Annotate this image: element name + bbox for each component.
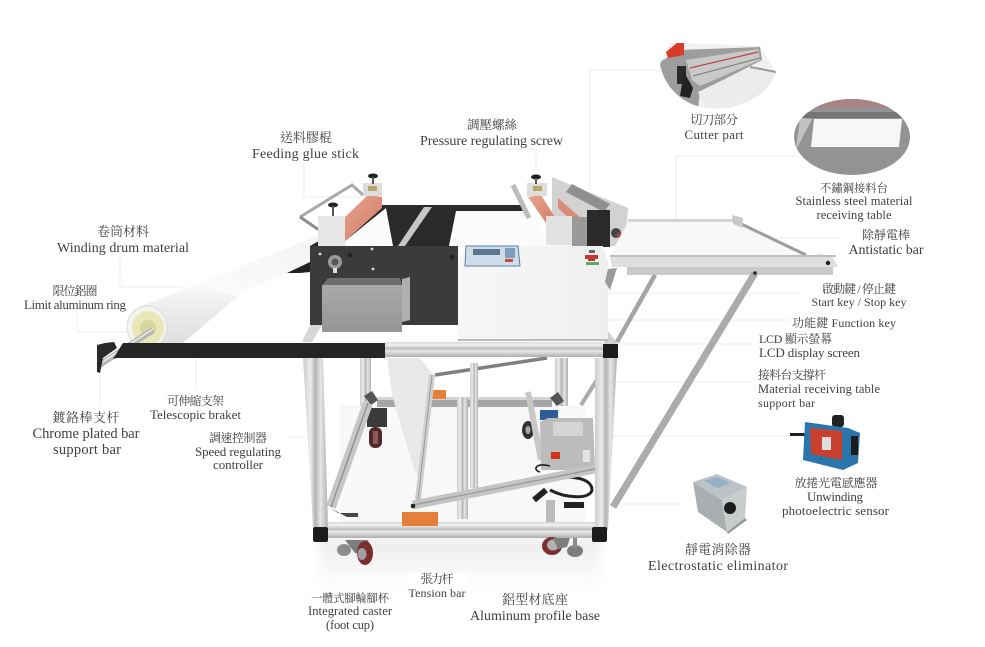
label: function key: 功能鍵 Function key xyxy=(792,315,896,330)
start and stop keys xyxy=(585,250,599,265)
label: photoelectric sensor: photoelectric sensor xyxy=(782,503,890,518)
label: tension bar xyxy=(407,571,467,601)
label: aluminum base: 鋁型材底座 xyxy=(502,592,568,607)
label: LCD display: LCD display screen xyxy=(759,345,860,360)
front casters xyxy=(337,537,583,565)
leader lines xyxy=(77,70,840,504)
rear casters xyxy=(367,408,534,448)
long diagonal brace xyxy=(411,466,610,508)
label: tension bar: Tension bar xyxy=(408,586,466,600)
label: speed controller: 調速控制器 xyxy=(209,430,267,445)
label: photoelectric sensor: 放捲光電感應器 xyxy=(794,475,878,490)
label: tension bar: 張力杆 xyxy=(420,571,454,586)
label: limit ring xyxy=(24,284,126,312)
orange block xyxy=(402,512,438,526)
inset: receiving table xyxy=(794,99,910,175)
telescopic bracket (black bar) xyxy=(113,343,385,359)
label: chrome plated bar: 鍍鉻棒支杆 xyxy=(52,410,120,425)
gray tray box xyxy=(322,277,410,332)
label: chrome plated bar: support bar xyxy=(53,442,121,458)
label: photoelectric sensor: Unwinding xyxy=(807,489,864,504)
label: electrostatic eliminator xyxy=(648,542,788,574)
cutter assembly xyxy=(552,177,628,248)
label: limit ring: Limit aluminum ring xyxy=(24,297,126,312)
label: photoelectric sensor xyxy=(782,475,890,518)
speed controller box xyxy=(540,410,595,470)
label: limit ring: 限位鋁圈 xyxy=(52,284,98,298)
label: chrome plated bar: Chrome plated bar xyxy=(32,426,140,442)
label: integrated caster xyxy=(308,591,393,632)
label: receiving table support bar: Material receiving table xyxy=(758,382,880,396)
dark rear diagonal xyxy=(435,358,547,375)
back plate xyxy=(310,205,550,246)
label: stainless table xyxy=(796,181,913,222)
label: aluminum base xyxy=(470,592,600,624)
label: aluminum base: Aluminum profile base xyxy=(470,609,600,624)
floor reflection xyxy=(320,405,600,588)
label: start stop key: 啟動鍵 / 停止鍵 xyxy=(822,281,896,296)
label: cutter part xyxy=(684,112,744,142)
label: antistatic bar: 除靜電棒 xyxy=(862,227,910,242)
label: pressure screw: 調壓螺絲 xyxy=(467,117,517,132)
label: receiving table support bar: 接料台支撐杆 xyxy=(758,367,826,382)
label: chrome plated bar xyxy=(32,410,140,458)
icon: unwinding photoelectric sensor xyxy=(790,415,860,470)
label: antistatic bar xyxy=(848,227,924,258)
label: speed controller: Speed regulating xyxy=(195,444,282,459)
label: receiving table support bar xyxy=(758,367,880,410)
label: feeding glue stick: Feeding glue stick xyxy=(252,147,359,162)
label: feeding glue stick xyxy=(252,130,359,162)
cables xyxy=(534,465,592,508)
winding drum material xyxy=(127,235,320,350)
LCD panel xyxy=(465,246,520,266)
label: speed controller: controller xyxy=(213,457,264,472)
label: electrostatic eliminator: 靜電消除器 xyxy=(685,542,751,557)
label: LCD display xyxy=(759,331,860,360)
label: pressure screw: Pressure regulating screw xyxy=(420,134,564,149)
label: electrostatic eliminator: Electrostatic eliminator xyxy=(648,559,788,574)
output table xyxy=(605,215,838,290)
right pressure roller xyxy=(513,174,572,245)
front legs xyxy=(303,358,617,530)
label: telescopic bracket: Telescopic braket xyxy=(150,407,241,422)
hanging paper xyxy=(387,358,434,476)
label: winding drum xyxy=(57,224,189,256)
label: stainless table: 不鏽鋼接料台 xyxy=(820,181,889,195)
label: pressure screw xyxy=(420,117,564,149)
label: winding drum: 卷筒材料 xyxy=(97,224,149,239)
top front bar xyxy=(385,342,618,358)
main machine photo xyxy=(97,174,838,588)
label: cutter part: Cutter part xyxy=(684,127,744,142)
label: start stop key xyxy=(812,281,906,309)
icon: electrostatic eliminator xyxy=(693,474,747,534)
label: antistatic bar: Antistatic bar xyxy=(848,243,924,258)
label: integrated caster: Integrated caster xyxy=(308,604,393,618)
inset: cutter part xyxy=(660,43,776,109)
label: telescopic bracket xyxy=(150,393,241,422)
white controller housing xyxy=(458,246,608,341)
label: cutter part: 切刀部分 xyxy=(690,112,738,127)
label: winding drum: Winding drum material xyxy=(57,241,189,256)
bottom bar xyxy=(313,508,607,542)
upper frame rails xyxy=(302,325,618,344)
rear orange tension block xyxy=(432,390,446,399)
label: integrated caster: 一體式腳輪腳杯 xyxy=(311,591,390,605)
chrome bar and end bracket xyxy=(97,329,153,373)
label: integrated caster: (foot cup) xyxy=(326,618,374,632)
label: speed controller xyxy=(195,430,282,472)
black side plate xyxy=(310,246,458,325)
label: stainless table: Stainless steel material xyxy=(796,194,913,208)
label: feeding glue stick: 送料膠棍 xyxy=(280,130,332,145)
label: telescopic bracket: 可伸縮支架 xyxy=(167,393,224,408)
material receiving table support bars xyxy=(613,271,757,507)
label: stainless table: receiving table xyxy=(816,208,892,222)
rear frame xyxy=(360,358,600,407)
inner frame bars xyxy=(331,363,541,519)
left feeding glue roller xyxy=(300,174,382,246)
label: LCD display: LCD 顯示螢幕 xyxy=(759,331,832,346)
label: start stop key: Start key / Stop key xyxy=(812,295,906,309)
label: receiving table support bar: support bar xyxy=(758,396,815,410)
